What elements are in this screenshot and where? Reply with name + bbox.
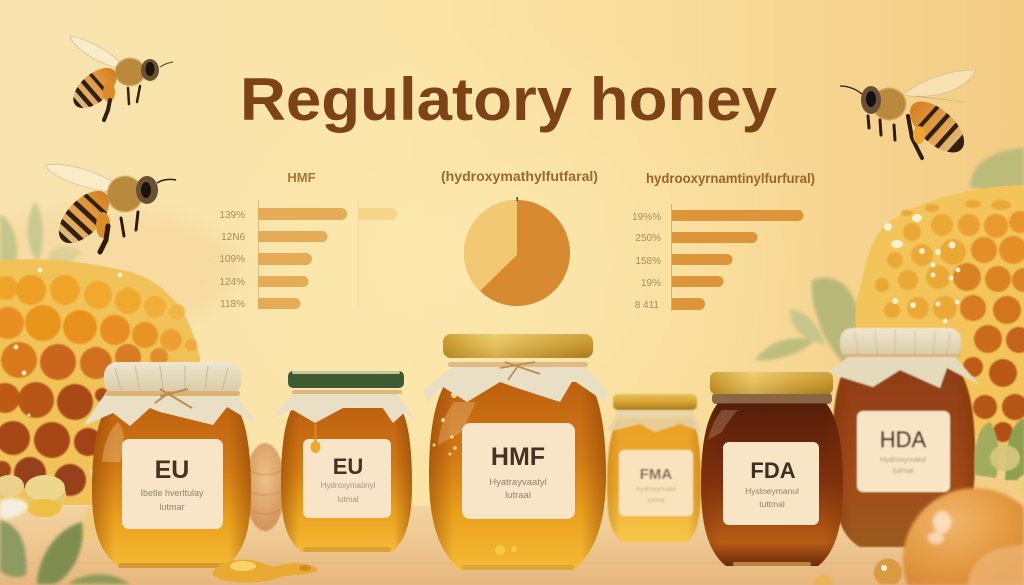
honey drip [310, 424, 320, 453]
jar body [832, 366, 975, 547]
bar 2 [635, 232, 758, 244]
bar 2 [221, 231, 328, 243]
bar 1 [219, 208, 347, 221]
label: Hystoeymanul [745, 486, 799, 496]
title: Regulatory honey [240, 66, 778, 133]
label: lutrnal [893, 466, 914, 475]
heading: HMF: HMF [287, 170, 316, 185]
glass neck [712, 393, 832, 404]
bar 3: 109% [219, 254, 245, 265]
cloth lid [83, 362, 257, 426]
jar body [92, 402, 251, 568]
honey drops: left [0, 475, 100, 540]
eye [146, 62, 154, 76]
honeycomb sparkles [14, 268, 122, 416]
green lid [288, 371, 404, 388]
bar 5 [635, 298, 705, 311]
head [136, 176, 158, 204]
antenna [840, 86, 862, 94]
label [122, 439, 223, 529]
bar 3: 158% [635, 256, 661, 267]
bar 1 [632, 210, 804, 223]
abdomen [910, 102, 964, 152]
bar 5: 118% [220, 299, 245, 310]
leaves and drop: right [974, 418, 1024, 495]
bar 1: 139% [219, 210, 245, 221]
label: FMA [640, 466, 672, 483]
label: EU [155, 456, 189, 484]
cloth lid [828, 328, 980, 388]
pie light slice [464, 200, 517, 291]
antenna [160, 62, 173, 67]
label [462, 423, 575, 519]
bee: top right [840, 70, 976, 163]
wooden dipper [245, 443, 285, 531]
small honey drops: bottom [813, 559, 902, 585]
right upper leaf [970, 148, 1024, 192]
legs [128, 86, 140, 104]
eye [141, 182, 151, 198]
bar chart: left [219, 200, 397, 310]
label: Hydroxymatul [880, 455, 926, 464]
jar body [281, 408, 412, 552]
jar: HMF [424, 334, 608, 570]
jar: FDA [701, 372, 843, 566]
bar 1 secondary [358, 208, 397, 220]
label: Hydroxymatinyl [321, 481, 376, 490]
honeycomb cells [0, 275, 197, 496]
bar 5 [220, 298, 300, 310]
mid right leaves [755, 278, 860, 365]
head [141, 59, 159, 81]
bar 3 [219, 253, 312, 265]
gold lid [710, 372, 833, 394]
thorax [107, 176, 143, 212]
antenna [157, 179, 176, 183]
honeycomb white sparkles [884, 214, 960, 324]
leaves: bottom left [0, 498, 130, 584]
eye [866, 91, 876, 107]
pollen leg [908, 116, 925, 158]
label: EU [333, 454, 363, 479]
honeycomb pale cells [875, 200, 1011, 320]
label: lutmal [337, 495, 359, 504]
wing [45, 164, 123, 193]
label: HDA [880, 427, 927, 452]
bar 2: 250% [635, 233, 661, 244]
honeycomb: right [855, 185, 1024, 470]
label: lutmal [647, 497, 665, 504]
bee: top left [65, 36, 173, 120]
bar 3 [635, 254, 732, 267]
heading: hydroxymethylfurfural right: hydrooxyrnamtinylfurfural) [646, 171, 815, 186]
bar 1: 19%% [632, 212, 661, 223]
jar: EU left [83, 362, 257, 568]
bar 4 [641, 276, 724, 289]
jar: HDA [828, 328, 980, 547]
pollen leg [96, 212, 110, 252]
leaves behind left honeycomb [0, 201, 82, 264]
jar: EU second [272, 371, 418, 552]
bar chart: right [632, 204, 804, 311]
bubbles [432, 392, 457, 456]
gold lid [443, 334, 593, 358]
bar 4 [219, 276, 308, 288]
pollen leg [103, 82, 115, 120]
large honey ball [903, 488, 1024, 585]
jar: FMA [607, 394, 702, 542]
label [723, 442, 819, 525]
honey spill [212, 560, 318, 583]
label [857, 411, 950, 492]
gold lid [613, 394, 697, 410]
head [861, 86, 881, 114]
label: FDA [750, 458, 796, 483]
pie chart [464, 197, 570, 306]
jar body [429, 382, 606, 570]
heading: hydroxymethylfurfural centre: (hydroxymathylfutfaral) [441, 169, 598, 184]
bee: middle left [45, 164, 176, 253]
abdomen [58, 190, 110, 244]
honeycomb: left [0, 259, 200, 505]
wooden table [0, 506, 1024, 585]
honeycomb deep cells [953, 211, 1024, 442]
cloth [607, 410, 702, 432]
label: Hyatrayvaatyl [489, 477, 547, 488]
bar 4: 124% [219, 277, 245, 288]
cloth [272, 390, 418, 423]
thorax [115, 58, 145, 86]
cloth [424, 362, 608, 402]
wing [902, 70, 976, 102]
jar body [701, 403, 843, 566]
abdomen [73, 68, 117, 108]
thorax [872, 88, 906, 120]
jar body [607, 418, 701, 542]
label: lutraal [505, 490, 531, 501]
wing [70, 36, 120, 68]
label: Ibetle hverltulay [140, 488, 204, 498]
legs [121, 212, 138, 236]
label [303, 439, 391, 518]
label: lutmar [159, 502, 185, 512]
label [619, 450, 693, 516]
legs [868, 116, 895, 140]
bar 2: 12N6 [221, 232, 245, 243]
label: HMF [491, 443, 545, 471]
bar 5: 8 411 [635, 300, 659, 311]
label: tuttmal [759, 499, 785, 509]
label: Hydroxymatul [636, 486, 676, 493]
bar 4: 19% [641, 278, 661, 289]
